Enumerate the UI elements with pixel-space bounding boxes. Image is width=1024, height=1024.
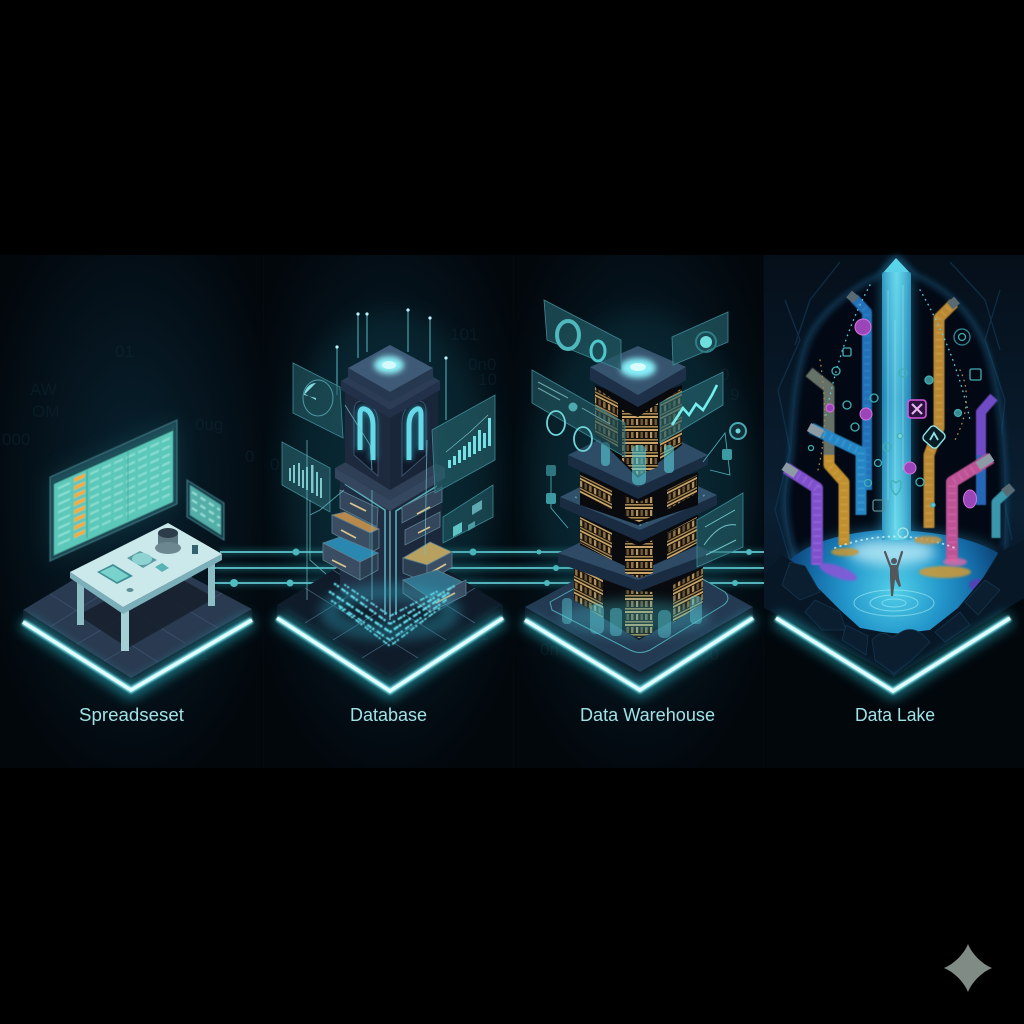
faint background code glyphs: 0 1 bbox=[40, 625, 64, 644]
faint background code glyphs: 10 bbox=[478, 370, 497, 389]
icon: teal data tile bbox=[921, 424, 947, 450]
neon floor edge bbox=[23, 620, 252, 692]
holographic panel: bar chart left bbox=[282, 442, 330, 512]
particle cloud at tower base bbox=[328, 584, 456, 646]
water droplets bbox=[818, 285, 970, 548]
connector lines between stages bbox=[215, 548, 764, 587]
pipe: pink bbox=[952, 458, 991, 562]
figure with raised arms bbox=[885, 552, 902, 596]
tier 2 shelves bbox=[580, 472, 698, 525]
holographic panel: pie chart bbox=[293, 363, 343, 438]
holographic panel: line chart bbox=[660, 372, 723, 443]
holographic panel: top left bbox=[544, 300, 621, 370]
faint background code glyphs: 00 bbox=[700, 645, 719, 664]
faint background code glyphs: OM bbox=[32, 402, 59, 421]
holographic panel: top right bbox=[672, 312, 728, 365]
holographic panel: dashboard rings bbox=[532, 370, 625, 457]
pipe: purple and blue right bbox=[981, 397, 994, 505]
pipe: teal right bbox=[996, 487, 1012, 538]
slab 3 bbox=[560, 458, 717, 542]
floor grid platform bbox=[277, 535, 503, 692]
slab 2 bbox=[568, 420, 708, 499]
left drawers bbox=[323, 490, 379, 580]
faint background code glyphs: 101 bbox=[450, 325, 478, 344]
cave rock wall bbox=[764, 255, 1024, 677]
waterfall bbox=[882, 257, 911, 540]
pipe: purple left bbox=[786, 468, 817, 565]
panel: data warehouse bbox=[525, 300, 753, 725]
antenna lines bbox=[335, 308, 448, 420]
pipe: blue diagonal bbox=[811, 428, 861, 515]
floor platform bbox=[23, 545, 252, 692]
floating data icons bbox=[808, 319, 981, 538]
holographic panel: lower right bbox=[697, 493, 743, 567]
tower cap bbox=[341, 345, 440, 418]
faint background code glyphs: 0 bbox=[720, 365, 729, 384]
pipe: grey to gold left bbox=[809, 372, 844, 545]
pool bbox=[788, 528, 1000, 634]
tier 4 shelves bbox=[574, 563, 703, 640]
circuit traces bbox=[307, 405, 427, 600]
label: Database: Database bbox=[350, 705, 427, 725]
panel: data lake bbox=[764, 255, 1024, 725]
right drawers bbox=[402, 487, 466, 612]
spreadsheet wall screen bbox=[50, 420, 177, 561]
desk bbox=[70, 523, 222, 651]
side tablet screen bbox=[187, 480, 224, 540]
faint background code glyphs: 0n0 bbox=[468, 355, 496, 374]
tier 1 shelves bbox=[595, 385, 682, 485]
neon floor edge bbox=[277, 618, 503, 692]
holographic fog at base bbox=[560, 596, 710, 638]
neon floor edge bbox=[776, 618, 1010, 692]
faint background code glyphs: 0ug bbox=[195, 415, 223, 434]
icon: sparkle watermark bbox=[944, 944, 992, 992]
faint background code glyphs bbox=[2, 325, 739, 664]
tower ledge bbox=[335, 438, 445, 511]
tower upper body bbox=[345, 385, 438, 490]
pipe caps bbox=[784, 294, 1012, 493]
monitor glow bbox=[50, 420, 177, 561]
faint background code glyphs: AW bbox=[30, 380, 57, 399]
faint background code glyphs: 01 bbox=[470, 625, 489, 644]
cave edge glow bbox=[786, 257, 1005, 562]
neon floor edge bbox=[525, 618, 753, 691]
faint background code glyphs: 9 bbox=[730, 385, 739, 404]
rock cracks bbox=[775, 262, 1012, 560]
panel: database bbox=[277, 308, 503, 725]
pipe: gold top right bbox=[929, 303, 954, 528]
faint background code glyphs: 0 bbox=[270, 455, 279, 474]
panel: spreadsheet bbox=[23, 420, 252, 725]
cave opening bbox=[786, 257, 1005, 632]
tier 3 shelves bbox=[580, 515, 698, 578]
faint background code glyphs: 0 bbox=[245, 447, 254, 466]
label: Data Warehouse: Data Warehouse bbox=[580, 705, 715, 725]
pipe: blue top left bbox=[854, 298, 867, 490]
faint background code glyphs: 01 bbox=[190, 645, 209, 664]
floor platform bbox=[525, 545, 753, 691]
holographic panel: lower right bbox=[443, 485, 493, 543]
spilled colour in pool bbox=[817, 536, 987, 591]
slab 4 bbox=[558, 515, 712, 592]
tower glow bbox=[285, 310, 495, 650]
icon: magenta data tile bbox=[908, 400, 926, 418]
faint background code glyphs: 01 bbox=[115, 342, 134, 361]
label: Data Lake: Data Lake bbox=[855, 705, 935, 725]
pipes bbox=[786, 298, 1012, 565]
circuit nodes bbox=[546, 423, 746, 528]
tower lower column bbox=[340, 478, 442, 622]
bottom rocks bbox=[764, 540, 1024, 677]
content band bbox=[0, 255, 1024, 768]
label: Spreadseset: Spreadseset bbox=[79, 705, 184, 725]
tower glow bbox=[530, 310, 750, 650]
roof slab bbox=[590, 346, 686, 407]
faint background code glyphs: 0n bbox=[540, 640, 559, 659]
holographic panel: bar chart right bbox=[432, 395, 495, 493]
faint background code glyphs: 000 bbox=[2, 430, 30, 449]
